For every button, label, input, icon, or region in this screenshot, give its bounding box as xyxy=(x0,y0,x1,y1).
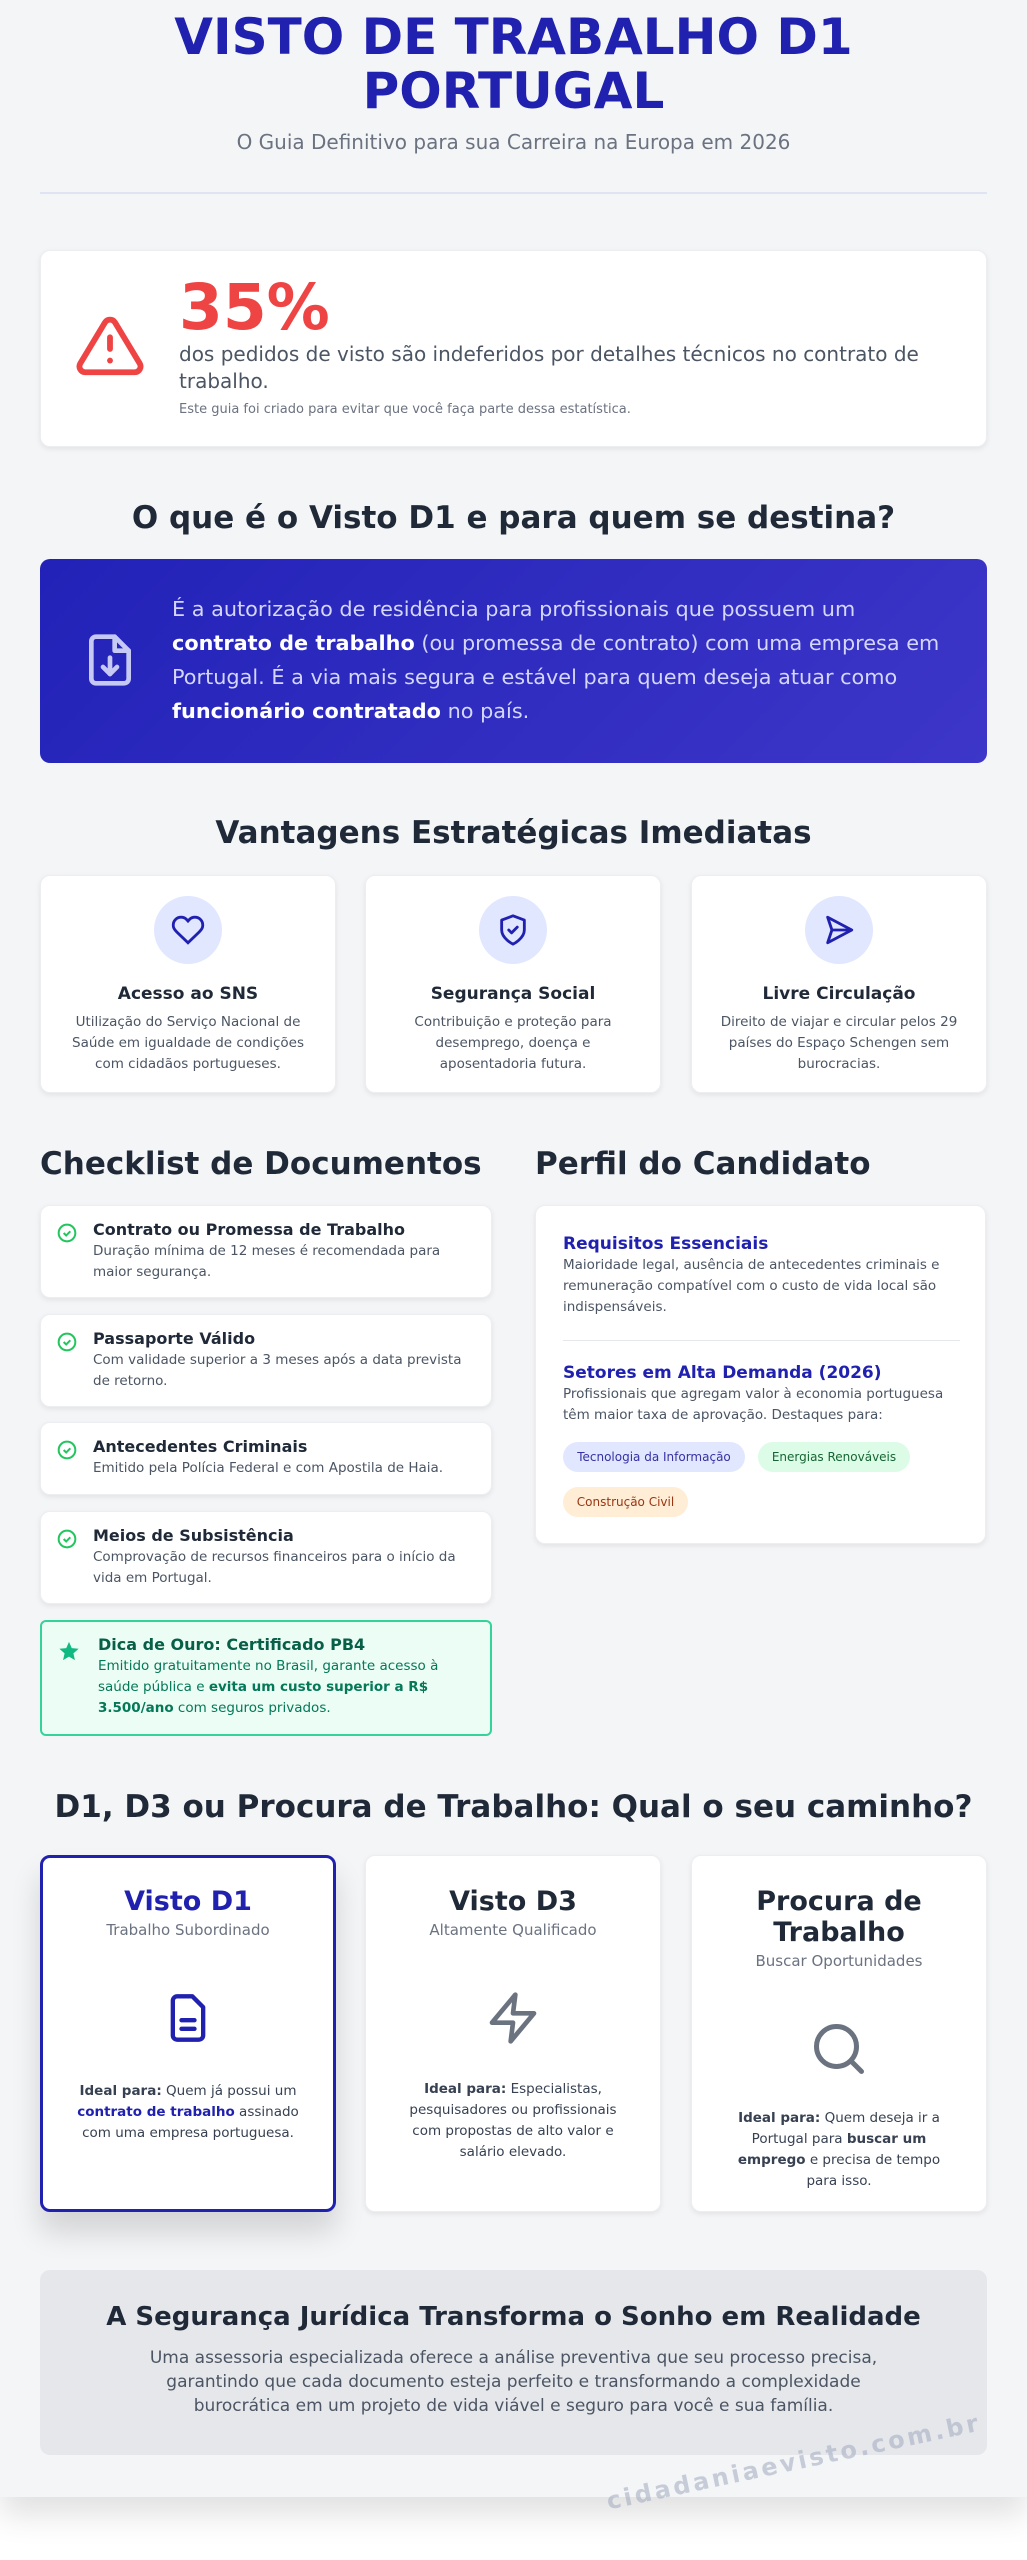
card: Visto D3: Altamente Qualificado xyxy=(429,1921,597,1939)
requirements: Maioridade legal, ausência de antecedentes criminais e remuneração compatível com o custo de vida local são indispensáveis. xyxy=(563,1257,939,1315)
checklist item: subsistence xyxy=(40,1511,492,1604)
callout: PB4 tip xyxy=(40,1620,492,1736)
title: PORTUGAL xyxy=(363,62,664,120)
card: free circulation xyxy=(691,875,987,1093)
heading: profile: Perfil do Candidato xyxy=(535,1146,870,1182)
card: Visto D1: Visto D1 xyxy=(124,1886,252,1917)
heading: paths: D1, D3 ou Procura de Trabalho: Qual o seu caminho? xyxy=(55,1789,972,1825)
checklist item: contract: Contrato ou Promessa de Trabalho xyxy=(93,1220,405,1239)
heading: checklist: Checklist de Documentos xyxy=(40,1146,482,1182)
card: job search: Trabalho xyxy=(773,1917,905,1948)
card: Visto D1 xyxy=(40,1855,336,2212)
tag: construction: Construção Civil xyxy=(577,1495,674,1509)
icon: send xyxy=(805,896,873,964)
card: Visto D3: Visto D3 xyxy=(449,1886,577,1917)
tag: energy xyxy=(758,1442,910,1472)
card: Visto D3: Ideal para: Especialistas, pesquisadores ou profissionais com propostas de alto valor e salário elevado. xyxy=(409,2081,617,2160)
card: Visto D3 xyxy=(365,1855,661,2212)
card: social security xyxy=(365,875,661,1093)
icon: heart xyxy=(154,896,222,964)
tag: IT xyxy=(563,1442,745,1472)
card: Visto D1: Trabalho Subordinado xyxy=(106,1921,270,1939)
heading: what is D1: O que é o Visto D1 e para quem se destina? xyxy=(132,500,895,536)
statistic text: 35% xyxy=(179,271,330,344)
card: job search: Ideal para: Quem deseja ir a Portugal para buscar um emprego e precisa de tempo para isso. xyxy=(738,2110,940,2189)
statistic text xyxy=(179,271,919,417)
card: SNS: Utilização do Serviço Nacional de Saúde em igualdade de condições com cidadãos portugueses. xyxy=(72,1014,304,1072)
callout: PB4 tip: Dica de Ouro: Certificado PB4 xyxy=(98,1635,365,1654)
title: VISTO DE TRABALHO D1 xyxy=(174,8,853,66)
checklist item: passport: Com validade superior a 3 meses após a data prevista de retorno. xyxy=(93,1352,462,1389)
watermark: cidadaniaevisto.com.br xyxy=(604,2409,984,2515)
card: SNS xyxy=(40,875,336,1093)
card: SNS: Acesso ao SNS xyxy=(118,984,258,1004)
tag: energy: Energias Renováveis xyxy=(772,1450,896,1464)
subtitle: O Guia Definitivo para sua Carreira na Europa em 2026 xyxy=(237,130,790,154)
checklist item: subsistence: Meios de Subsistência xyxy=(93,1526,294,1545)
checklist item: passport: Passaporte Válido xyxy=(93,1329,255,1348)
sectors xyxy=(563,1363,943,1423)
panel: D1 definition xyxy=(40,559,987,763)
card: Visto D1: Ideal para: Quem já possui um contrato de trabalho assinado com uma empresa portuguesa. xyxy=(77,2083,299,2141)
checklist item: criminal record: Emitido pela Polícia Federal e com Apostila de Haia. xyxy=(93,1460,443,1476)
icon: shield xyxy=(479,896,547,964)
card: social security: Contribuição e proteção para desemprego, doença e aposentadoria futura. xyxy=(414,1014,612,1072)
card: free circulation: Livre Circulação xyxy=(763,984,915,1004)
icon: document xyxy=(170,1994,206,2042)
tag: construction xyxy=(563,1487,688,1517)
checklist item: criminal record xyxy=(40,1422,492,1495)
panel: conclusion: A Segurança Jurídica Transforma o Sonho em Realidade xyxy=(106,2302,921,2332)
panel: candidate profile xyxy=(535,1205,986,1544)
sectors: Setores em Alta Demanda (2026) xyxy=(563,1363,882,1383)
card: job search: Buscar Oportunidades xyxy=(756,1952,922,1970)
icon: star xyxy=(60,1642,78,1660)
checklist item: subsistence: Comprovação de recursos financeiros para o início da vida em Portugal. xyxy=(93,1549,456,1586)
icon: warning triangle xyxy=(76,316,144,376)
card: job search xyxy=(691,1855,987,2212)
panel: conclusion: Uma assessoria especializada oferece a análise preventiva que seu processo precisa, garantindo que cada documento esteja perfeito e transformando a complexidade burocrática em um projeto de vida viável e seguro para você e sua família. xyxy=(150,2348,877,2416)
panel: conclusion xyxy=(40,2270,987,2455)
icon: search xyxy=(814,2024,864,2074)
statistic text: dos pedidos de visto são indeferidos por detalhes técnicos no contrato de trabalho. xyxy=(179,342,919,393)
requirements: Requisitos Essenciais xyxy=(563,1234,768,1254)
statistic text: Este guia foi criado para evitar que você faça parte dessa estatística. xyxy=(179,402,631,417)
card: free circulation: Direito de viajar e circular pelos 29 países do Espaço Schengen sem burocracias. xyxy=(721,1014,957,1072)
heading: advantages: Vantagens Estratégicas Imediatas xyxy=(215,815,812,851)
title xyxy=(174,8,853,120)
definition text: É a autorização de residência para profissionais que possuem um contrato de trabalho (ou promessa de contrato) com uma empresa em Portugal. É a via mais segura e estável para quem deseja atuar como funcionário contratado no país. xyxy=(172,597,939,723)
sectors: Profissionais que agregam valor à economia portuguesa têm maior taxa de aprovação. Destaques para: xyxy=(563,1386,943,1423)
panel: statistic alert xyxy=(40,250,987,447)
callout: PB4 tip: Emitido gratuitamente no Brasil, garante acesso à saúde pública e evita um custo superior a R$ 3.500/ano com seguros privados. xyxy=(98,1658,438,1716)
card: job search: Procura de xyxy=(756,1886,922,1917)
checklist item: criminal record: Antecedentes Criminais xyxy=(93,1437,307,1456)
icon: document download xyxy=(89,634,131,686)
checklist item: contract xyxy=(40,1205,492,1298)
checklist item: contract: Duração mínima de 12 meses é recomendada para maior segurança. xyxy=(93,1243,440,1280)
checklist item: passport xyxy=(40,1314,492,1407)
tag: IT: Tecnologia da Informação xyxy=(577,1450,731,1464)
card: social security: Segurança Social xyxy=(431,984,595,1004)
icon: lightning xyxy=(490,1992,536,2044)
